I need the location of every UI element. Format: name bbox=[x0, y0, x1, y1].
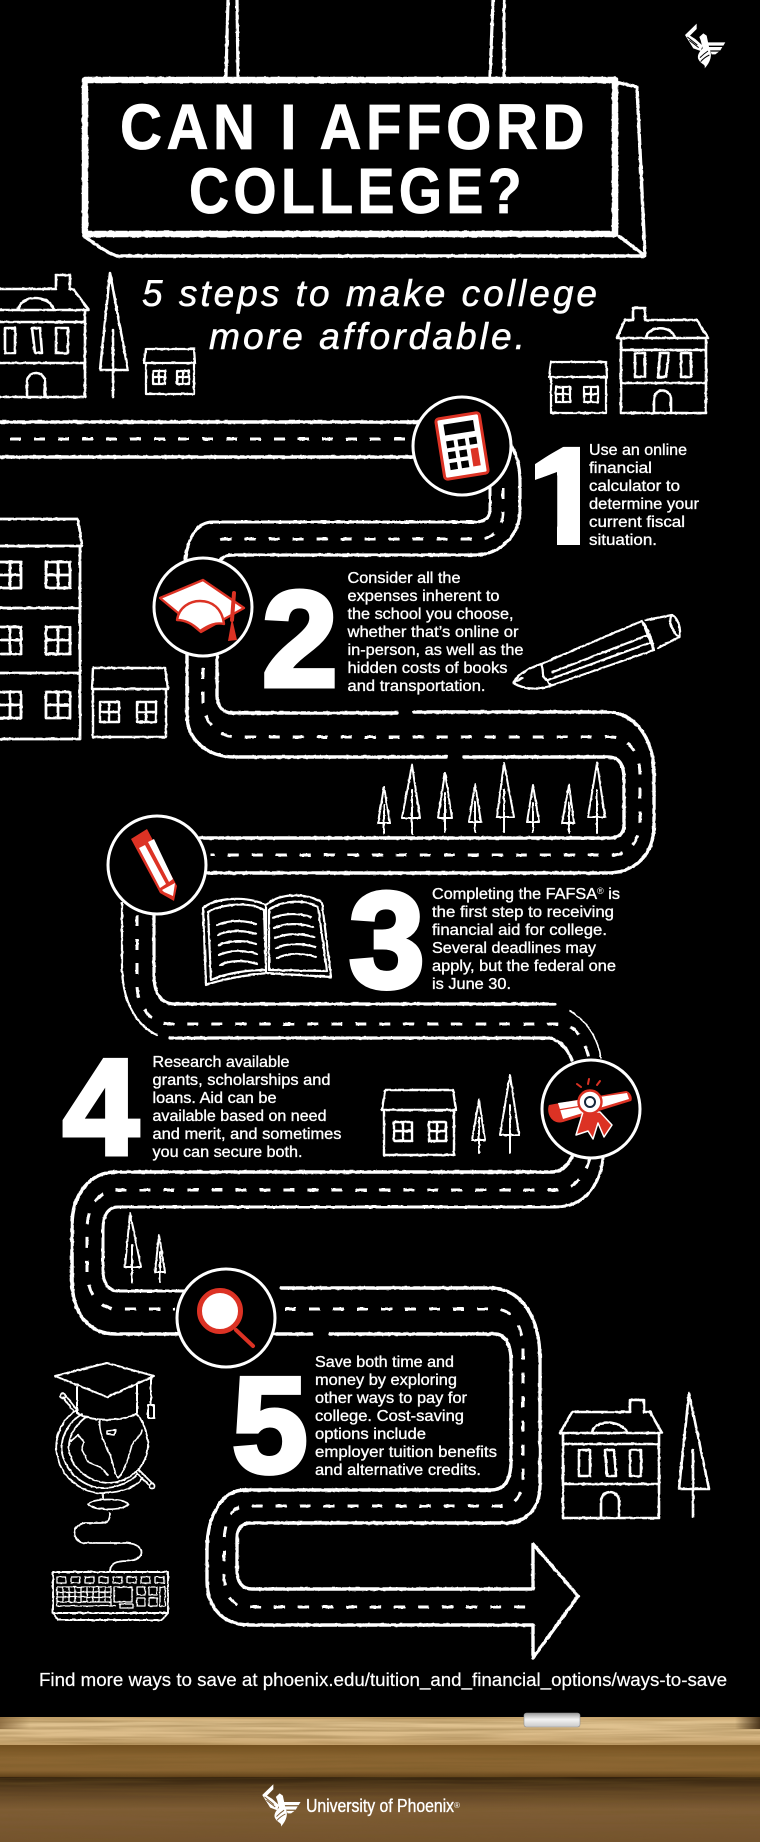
icon: phoenix bbox=[262, 1784, 301, 1827]
tree: bottom right bbox=[679, 1393, 709, 1517]
step 5 text: Save both time and bbox=[315, 1354, 454, 1371]
step 4 text: available based on need bbox=[152, 1108, 326, 1125]
subtitle bbox=[142, 273, 600, 357]
icon: red pencil bbox=[131, 829, 177, 901]
badge 3: pencil bbox=[108, 816, 206, 914]
step 3 bbox=[349, 864, 620, 1016]
number 1: 1 bbox=[530, 422, 606, 574]
step 5 text: and alternative credits. bbox=[315, 1462, 481, 1479]
step 5 text: college. Cost-saving bbox=[315, 1408, 464, 1425]
badge 1: calculator bbox=[413, 397, 511, 495]
step 1 text: financial bbox=[589, 460, 652, 477]
step 2 text: the school you choose, bbox=[348, 606, 514, 623]
step 1 text: determine your bbox=[589, 496, 700, 513]
logo: University of Phoenix: University of Phoenix bbox=[306, 1796, 454, 1816]
arrowhead at road end bbox=[533, 1544, 578, 1658]
step 4 text: loans. Aid can be bbox=[152, 1090, 277, 1107]
footer link text: Find more ways to save at phoenix.edu/tuition_and_financial_options/ways-to-save bbox=[39, 1670, 727, 1691]
number 4: 4 bbox=[63, 1031, 139, 1183]
number 3: 3 bbox=[349, 864, 425, 1016]
house: bottom right bbox=[560, 1400, 662, 1518]
road edges bbox=[0, 422, 654, 1625]
chalk stick bbox=[524, 1713, 580, 1727]
step 5 text bbox=[315, 1354, 497, 1479]
step 5 text: money by exploring bbox=[315, 1372, 457, 1389]
icon: diploma scroll with ribbon bbox=[548, 1079, 632, 1139]
small house: left bbox=[92, 668, 168, 737]
logo: University of Phoenix bbox=[262, 1784, 460, 1827]
step 2 text: hidden costs of books bbox=[348, 660, 508, 677]
number 2: 2 bbox=[262, 563, 338, 715]
title: COLLEGE? bbox=[189, 155, 526, 227]
step 4 text: and merit, and sometimes bbox=[152, 1126, 342, 1143]
wood ledge and frame bbox=[0, 1717, 760, 1842]
step 1 bbox=[535, 443, 699, 546]
step 4 text: Research available bbox=[152, 1054, 290, 1071]
number 5: 5 bbox=[232, 1349, 308, 1501]
step 1 text: calculator to bbox=[589, 478, 680, 495]
step 3 text bbox=[432, 886, 620, 993]
pencil sketch bbox=[513, 615, 680, 689]
icon: calculator bbox=[435, 412, 489, 480]
small house: step 4 bbox=[382, 1090, 456, 1155]
title: CAN I AFFORD bbox=[120, 91, 589, 163]
apartment building: left bbox=[0, 519, 82, 739]
subtitle: 5 steps to make college bbox=[142, 273, 600, 314]
book sketch bbox=[203, 895, 331, 985]
hanging sign bbox=[84, 0, 645, 256]
icon: graduation cap bbox=[160, 580, 244, 641]
house: top right bbox=[617, 308, 708, 413]
keyboard bbox=[53, 1572, 168, 1620]
step 2 text: in-person, as well as the bbox=[348, 642, 524, 659]
step 2 text: whether that’s online or bbox=[346, 624, 519, 641]
title bbox=[120, 91, 589, 227]
globe with graduation cap bbox=[55, 1363, 154, 1572]
step 1 text: Use an online bbox=[589, 442, 687, 459]
step 5 bbox=[232, 1349, 497, 1501]
step 2 text bbox=[346, 570, 524, 695]
trees: row beside road bbox=[378, 763, 605, 834]
step 1 text bbox=[589, 442, 700, 549]
step 2 bbox=[262, 563, 524, 715]
road centre dashes bbox=[10, 439, 640, 1607]
step 5 text: other ways to pay for bbox=[315, 1390, 468, 1407]
step 3 text: ® bbox=[597, 886, 604, 896]
subtitle: more affordable. bbox=[209, 316, 528, 357]
badge 2: graduation cap bbox=[154, 558, 252, 656]
trees: inside road bend bbox=[125, 1213, 165, 1282]
step 1 text: current fiscal bbox=[589, 514, 685, 531]
step 2 text: expenses inherent to bbox=[348, 588, 500, 605]
badge 4: diploma bbox=[542, 1060, 640, 1158]
step 3 text: financial aid for college. bbox=[432, 922, 607, 939]
icon: magnifying glass bbox=[200, 1290, 253, 1346]
step 4 text: grants, scholarships and bbox=[152, 1072, 330, 1089]
step 1 text: situation. bbox=[589, 532, 657, 549]
step 3 text: is bbox=[604, 886, 620, 903]
house: top left bbox=[0, 275, 89, 397]
step 4 bbox=[63, 1031, 342, 1183]
step 5 text: employer tuition benefits bbox=[315, 1444, 497, 1461]
logo: University of Phoenix: ® bbox=[454, 1801, 460, 1810]
step 2 text: and transportation. bbox=[348, 678, 486, 695]
small house: top right bbox=[549, 362, 607, 413]
step 3 text: apply, but the federal one bbox=[432, 958, 616, 975]
logo: phoenix top right bbox=[685, 24, 725, 68]
step 3 text: the first step to receiving bbox=[432, 904, 614, 921]
small house: top left bbox=[144, 349, 195, 394]
step 5 text: options include bbox=[315, 1426, 426, 1443]
step 3 text: is June 30. bbox=[432, 976, 511, 993]
step 4 text: you can secure both. bbox=[152, 1144, 302, 1161]
badge 5: magnifier bbox=[177, 1269, 275, 1367]
step 4 text bbox=[152, 1054, 342, 1161]
step 2 text: Consider all the bbox=[348, 570, 461, 587]
step 3 text: Completing the FAFSA bbox=[432, 886, 595, 903]
trees: step 4 bbox=[472, 1075, 519, 1153]
step 3 text: Several deadlines may bbox=[432, 940, 596, 957]
tree: top left bbox=[100, 273, 128, 397]
